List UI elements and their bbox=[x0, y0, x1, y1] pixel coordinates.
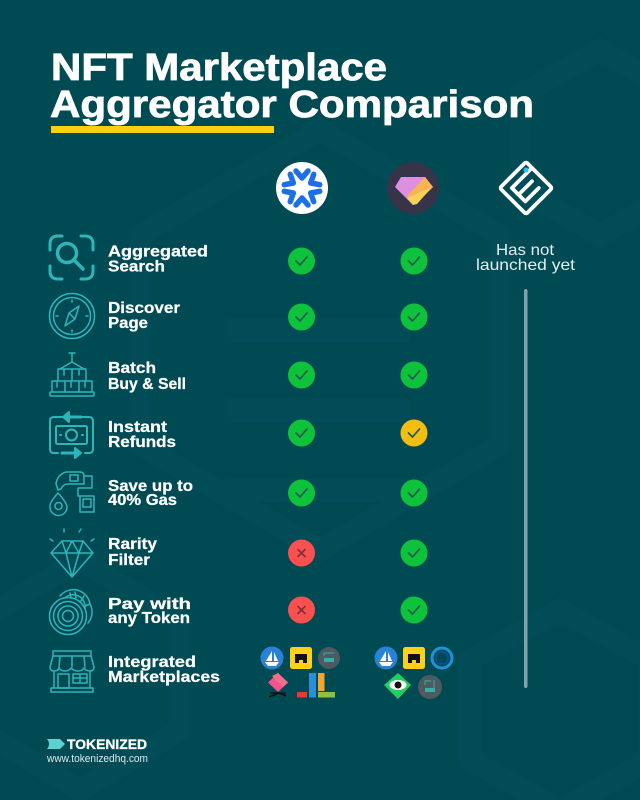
icon: coloured bars bbox=[297, 673, 335, 698]
text: has not launched yet bbox=[476, 242, 576, 274]
footer brand bbox=[46, 736, 148, 765]
label: Page bbox=[108, 315, 148, 332]
icon: storefront bbox=[50, 651, 94, 692]
icon: fuel pump bbox=[50, 472, 94, 516]
label: Pay with bbox=[108, 596, 191, 613]
brand name: TOKENIZED bbox=[67, 736, 147, 752]
partial check: col 2 bbox=[400, 420, 428, 446]
cross: col 1 bbox=[288, 540, 315, 566]
text: has not launched yet: launched yet bbox=[476, 257, 576, 274]
label bbox=[108, 654, 220, 686]
row: pay with any token bbox=[50, 590, 428, 634]
icon: Rarible bbox=[403, 647, 425, 669]
vertical bar bbox=[524, 289, 528, 688]
icon: compass bbox=[50, 294, 94, 338]
icon: OpenSea bbox=[374, 646, 398, 670]
check: col 2 bbox=[400, 362, 428, 388]
label bbox=[108, 419, 176, 451]
check: col 1 bbox=[288, 304, 315, 330]
logo: gem on dark circle bbox=[387, 162, 439, 214]
icon: OpenSea bbox=[260, 646, 284, 670]
check: col 1 bbox=[288, 480, 315, 506]
label bbox=[108, 360, 186, 393]
check: col 1 bbox=[288, 248, 315, 274]
label: Save up to bbox=[108, 478, 193, 495]
icon: Rarible bbox=[290, 647, 312, 669]
text: has not launched yet: Has not bbox=[496, 242, 555, 259]
label: Discover bbox=[108, 300, 180, 317]
label: Aggregated bbox=[108, 244, 208, 260]
logo: white circle with blue star bbox=[276, 162, 328, 214]
label: Marketplaces bbox=[108, 669, 220, 686]
row: integrated marketplaces bbox=[50, 646, 452, 699]
row: rarity filter bbox=[50, 529, 428, 577]
label bbox=[108, 300, 180, 332]
check: col 2 bbox=[400, 540, 428, 566]
label: 40% Gas bbox=[108, 492, 177, 509]
title bbox=[50, 47, 534, 126]
row: batch buy and sell bbox=[50, 353, 428, 396]
row: discover page bbox=[50, 294, 428, 338]
website: www.tokenizedhq.com bbox=[46, 753, 148, 765]
marketplaces: col 1 bbox=[260, 646, 340, 698]
label: Buy & Sell bbox=[108, 376, 186, 393]
title: Aggregator Comparison bbox=[50, 84, 534, 126]
logo mark bbox=[47, 739, 65, 749]
row: aggregated search bbox=[50, 236, 428, 279]
icon: boxes on pallet bbox=[50, 353, 94, 396]
label: Filter bbox=[108, 552, 150, 569]
label: Rarity bbox=[108, 536, 157, 553]
check: col 2 bbox=[400, 304, 428, 330]
label bbox=[108, 478, 193, 509]
check: col 2 bbox=[400, 480, 428, 506]
label: Refunds bbox=[108, 434, 176, 451]
label: Batch bbox=[108, 360, 156, 377]
icon: grey circle marketplace bbox=[318, 647, 340, 669]
icon: pink diamond bbox=[268, 673, 288, 697]
check: col 1 bbox=[288, 420, 315, 446]
label bbox=[108, 244, 208, 276]
label: Search bbox=[108, 258, 165, 276]
check: col 2 bbox=[400, 248, 428, 274]
label bbox=[108, 536, 157, 569]
icon: banknote with arrows bbox=[50, 412, 93, 458]
icon: blue ring bbox=[432, 648, 452, 668]
icon: search bbox=[50, 236, 93, 279]
icon: diamond bbox=[50, 529, 94, 577]
row: instant refunds bbox=[50, 412, 428, 458]
label: Instant bbox=[108, 419, 168, 436]
label: any Token bbox=[108, 610, 190, 627]
title: NFT Marketplace bbox=[51, 47, 387, 89]
check: col 2 bbox=[400, 596, 428, 624]
label bbox=[108, 596, 191, 627]
check: col 1 bbox=[288, 362, 315, 388]
icon: green eye bbox=[384, 673, 411, 699]
title underline bbox=[51, 126, 274, 133]
logo: maze diamond, not launched bbox=[500, 162, 552, 214]
cross: col 1 bbox=[288, 596, 315, 624]
marketplaces: col 2 bbox=[374, 646, 452, 699]
row: save gas bbox=[50, 472, 428, 516]
icon: grey circle bbox=[418, 675, 442, 699]
label: Integrated bbox=[108, 654, 196, 671]
icon: coins bbox=[50, 590, 92, 634]
